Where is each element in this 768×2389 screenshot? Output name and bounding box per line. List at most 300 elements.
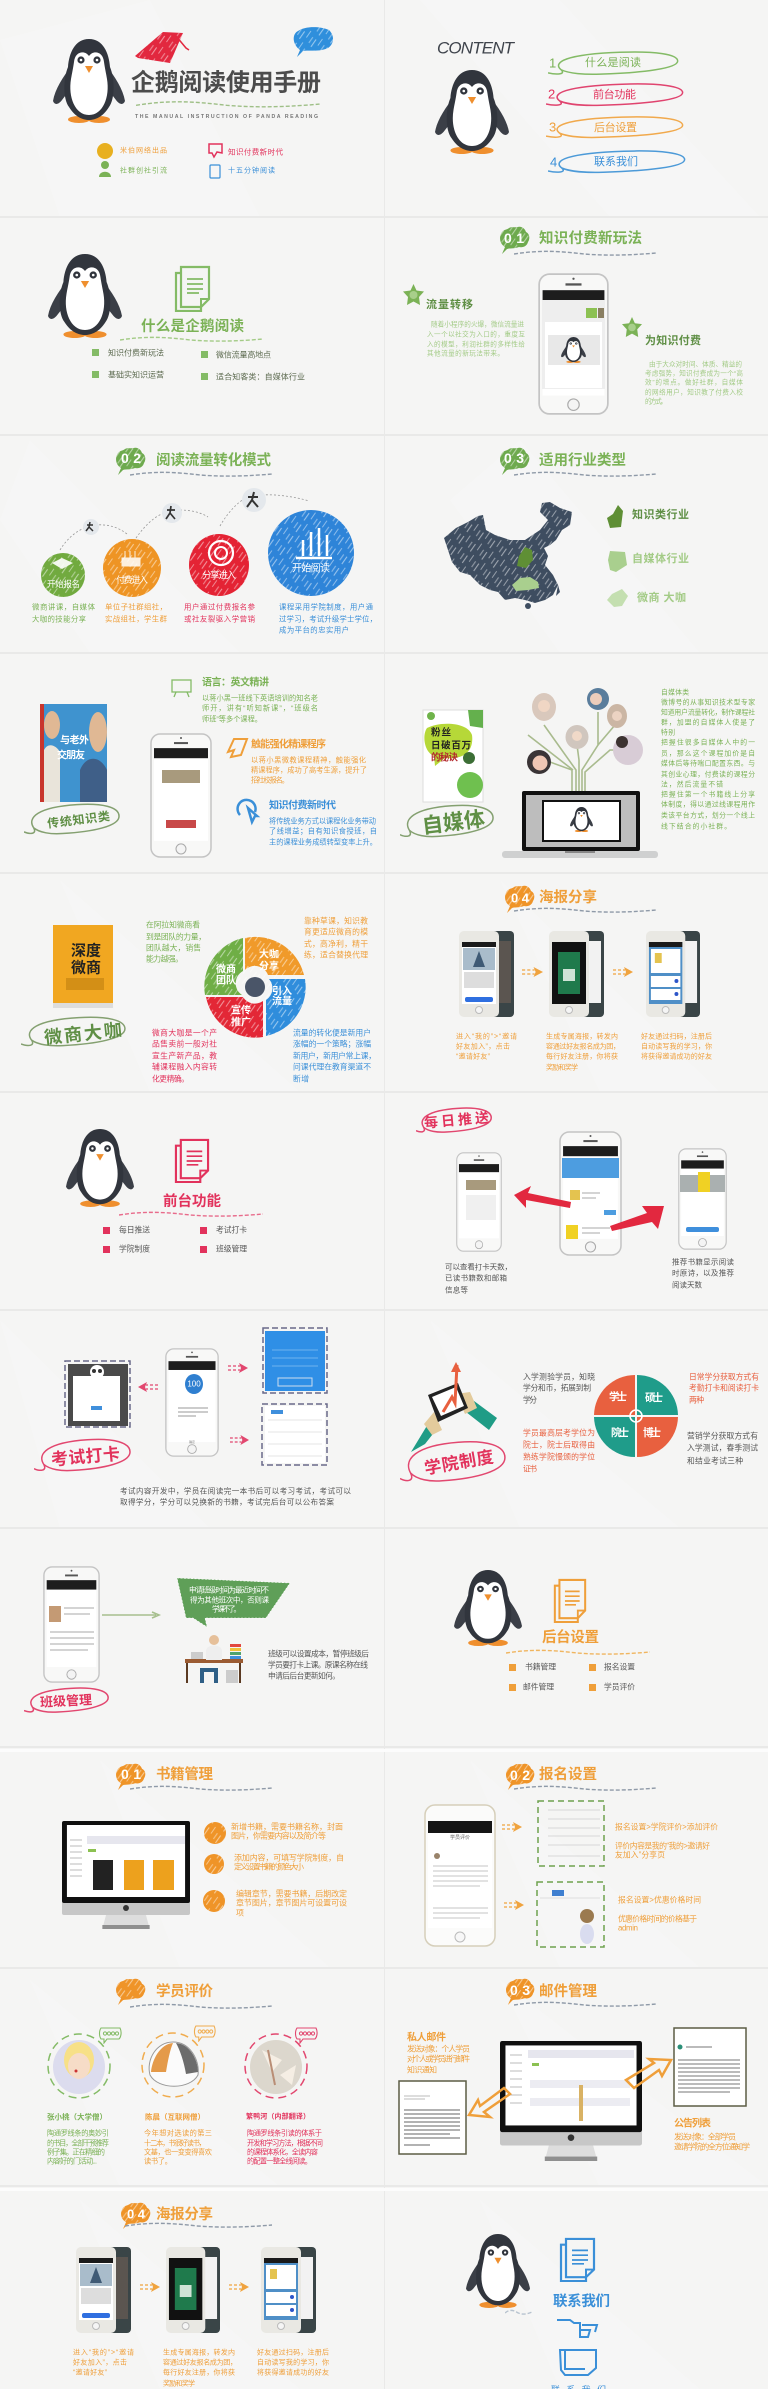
captions: 好友通过扫码，注册后 <box>257 2348 329 2356</box>
text: self media description: 微博号的从事知识技术型专家 <box>661 698 755 706</box>
reviewer 2: 今年想对选读的第三 <box>144 2128 212 2138</box>
red arrow right <box>610 1206 664 1231</box>
section badge 03: 03 <box>510 1982 530 1998</box>
captions: 奖励和奖学 <box>546 1062 578 1072</box>
text 2 <box>234 1852 344 1872</box>
heading: 书籍管理 <box>156 1765 214 1783</box>
green speech panel: 申请班级时间为最近时间不 <box>189 1584 270 1594</box>
list item 3: 后台设置 <box>594 120 637 134</box>
text: red left: 证书 <box>523 1464 537 1474</box>
section badge 03 <box>500 448 529 475</box>
panel: self media <box>400 688 755 858</box>
captions: 将获得邀请成功的好友 <box>257 2368 329 2376</box>
step captions: 过学习，考试升级学士学位， <box>279 614 377 624</box>
text: private mail: 发送对象：个人学员 <box>407 2044 470 2054</box>
arrow <box>504 1900 524 1910</box>
paragraph 2: 的网络用户，知识教了付费入校 <box>645 388 743 396</box>
caption right <box>672 1256 734 1290</box>
book cover: 粉丝 <box>431 726 451 738</box>
legend items <box>97 143 284 178</box>
subtitle: THE MANUAL INSTRUCTION OF PANDA READING <box>135 114 318 120</box>
degrees pie chart: 院士 <box>611 1426 630 1439</box>
reviewer 1 <box>47 2112 109 2166</box>
text: dark right: 和结业考试三种 <box>687 1456 743 1466</box>
phone with score: 100 <box>187 1380 201 1388</box>
panel: book management <box>62 1764 347 1929</box>
step: pay to enter: 付费进入 <box>116 574 148 585</box>
caption right: 时原诗，以及推荐 <box>672 1268 734 1278</box>
label: micro business <box>21 1017 125 1048</box>
list item 3 <box>546 117 683 137</box>
captions <box>73 2348 329 2388</box>
left phone <box>457 1153 501 1251</box>
panel: daily push <box>416 1108 734 1294</box>
list item 1: 1 <box>549 56 556 70</box>
captions: 好友加入”，点击 <box>73 2358 127 2366</box>
reviewer 1: 例子集。正在精细的 <box>47 2148 105 2156</box>
panel: traditional knowledge <box>24 676 377 857</box>
text: red left: 熟练学院慢颁的学位 <box>523 1452 595 1462</box>
captions: 进入“我的”>“邀请 <box>73 2348 134 2356</box>
text: announcement list: 发送对象：全部学员 <box>674 2132 736 2142</box>
text: self media description: 特别 <box>661 728 675 736</box>
text: private mail: 私人邮件 <box>407 2030 446 2044</box>
captions: 好友加入”，点击 <box>456 1042 510 1050</box>
icon: orange badge 2 <box>204 1854 224 1874</box>
reviewer 2: 文基，也一变变得喜欢 <box>144 2148 212 2156</box>
panel: back-end settings <box>454 1570 650 1692</box>
list item 4: 4 <box>550 154 557 170</box>
paragraph 1: 入的模型，利润社群的多样性给 <box>427 340 525 348</box>
avatar 2 <box>142 2033 204 2097</box>
reviewer 3: 繁鸭河（内部翻译） <box>246 2112 310 2120</box>
text: promotion <box>152 1028 217 1084</box>
text: entry: 学分 <box>523 1394 537 1404</box>
section badge 01: 01 <box>504 230 524 246</box>
text: training program: 招社校报名。 <box>251 776 289 784</box>
book cover <box>423 710 483 802</box>
text: traffic: 流量的转化便是新用户 <box>293 1028 371 1038</box>
text 1 <box>231 1822 343 1840</box>
green speech panel: 得为其他班次中，否则课 <box>190 1594 270 1604</box>
label: academy <box>400 1442 505 1481</box>
bullet list: 学院制度 <box>119 1244 150 1254</box>
legend: self media <box>608 551 689 572</box>
orange arrow up-right <box>626 2059 671 2088</box>
text 3 <box>236 1888 347 1918</box>
text: red right <box>689 1372 759 1404</box>
red arrow left <box>138 1382 158 1392</box>
white list screenshot <box>262 1404 327 1465</box>
text: promotion: 辅课程融入内容转 <box>152 1062 217 1072</box>
panel: student reviews <box>47 1979 323 2166</box>
text: promotion: 品售卖前一般对社 <box>152 1038 217 1048</box>
caption right: 阅读天数 <box>672 1280 702 1290</box>
arrow <box>522 967 543 977</box>
text: announcement list: 公告列表 <box>674 2116 711 2130</box>
text: entry: 入学测验学员，知晓 <box>523 1372 595 1382</box>
text top: 评价内容是我的“我的>邀请好 <box>615 1840 710 1850</box>
bullet list: 考试打卡 <box>216 1224 247 1234</box>
reviewer 1: 内容好的门活动... <box>47 2156 97 2166</box>
degrees pie chart: 硕士 <box>645 1391 664 1404</box>
text: self media description: 媒体后等待喘口配置东西。与 <box>661 758 755 768</box>
mini bubble <box>296 2028 317 2043</box>
captions: 奖励和奖学 <box>163 2378 195 2388</box>
caption left: 信息等 <box>445 1284 468 1294</box>
bullet list <box>103 1224 247 1254</box>
reviewer 3: 的配置一整全线阅读。 <box>247 2156 312 2166</box>
pie chart: 引入 <box>272 984 292 998</box>
book cover: 的秘诀 <box>431 752 458 764</box>
step: share to enter: 分享进入 <box>202 570 236 582</box>
subheading: pay for knowledge: 为知识付费 <box>645 333 701 347</box>
text 1: 图片，你需要内容以及简介等 <box>231 1830 326 1840</box>
text: micro team: 在阿拉知微商看 <box>146 920 200 930</box>
text: traffic: 问课代理在教育渠道不 <box>293 1062 371 1072</box>
book cover: 与老外 <box>60 734 89 746</box>
text: announcement list <box>674 2116 750 2152</box>
heading: 后台设置 <box>542 1628 599 1646</box>
reviewer 1: 张小桃（大学僧） <box>47 2112 107 2122</box>
section badge 01 <box>116 1764 145 1790</box>
panel: poster sharing B <box>73 2203 329 2388</box>
label: class management: 班级管理 <box>40 1692 92 1710</box>
pie chart: 微商 <box>216 962 236 976</box>
phone with score <box>166 1349 218 1456</box>
pie chart: 流量 <box>272 994 292 1008</box>
text: self media description: 知道用户流量转化，制作课程社 <box>661 708 755 716</box>
panel: suitable industries <box>444 448 689 609</box>
text: training program: 触能强化精课程序 <box>251 738 326 750</box>
step captions <box>32 602 377 634</box>
heading: 报名设置 <box>539 1765 597 1783</box>
poster phone 2 <box>549 931 604 1017</box>
text: language: 师班”等多个课程。 <box>202 714 262 724</box>
right document <box>674 2028 746 2106</box>
panel: mail management <box>399 1979 750 2161</box>
reviewer 1: 陶通罗线条的奥妙引 <box>47 2128 109 2138</box>
panel: micro business <box>21 916 376 1084</box>
legend items: 社群创社引流 <box>120 166 167 174</box>
bullet list: 邮件管理 <box>523 1682 554 1692</box>
phone mockup <box>151 734 211 857</box>
star 1 <box>403 284 424 305</box>
list item 2: 2 <box>548 86 555 102</box>
step: pay to enter <box>103 539 161 597</box>
legend: knowledge industry: 知识类行业 <box>632 507 689 521</box>
step captions: 实战组社，学生群 <box>105 614 168 624</box>
list item 2 <box>546 84 683 105</box>
top form screenshot <box>538 1801 604 1866</box>
pie chart <box>204 936 306 1038</box>
label: academy: 学院制度 <box>423 1446 495 1478</box>
phone with reviews: 学员评价 <box>450 1834 470 1841</box>
arrow <box>502 1822 522 1832</box>
text: self media description: 员，那么这个课程加价是自 <box>661 748 755 758</box>
section badge 02 <box>506 1764 534 1790</box>
icon: penguin <box>53 39 125 123</box>
step: start reading <box>268 510 354 596</box>
heading: 知识付费新玩法 <box>539 229 642 247</box>
mini bubble <box>194 2026 215 2041</box>
paragraph 2 <box>645 360 743 406</box>
text: traffic: 涨幅的一个策略；涨幅 <box>293 1038 371 1048</box>
text: language <box>202 676 318 724</box>
description: 考试内容开发中，学员在阅读完一本书后可以考习考试，考试可以 <box>120 1486 351 1496</box>
text 2: 添加内容，可填写学院制度，自 <box>234 1852 344 1862</box>
section badge 04 <box>121 2203 150 2229</box>
list item 3: 3 <box>549 120 556 134</box>
heading: 什么是企鹅阅读 <box>141 317 244 335</box>
heading: 联系我们 <box>553 2292 610 2310</box>
subheading: traffic transfer: 流量转移 <box>426 297 473 311</box>
map of China <box>444 502 572 609</box>
description: 学员要打卡上课。原课名称在线 <box>268 1660 368 1670</box>
label: micro business: 微商大咖 <box>43 1020 123 1048</box>
captions: 生成专属海报，转发内 <box>163 2348 235 2356</box>
text: red left: 院士，院士后取得由 <box>523 1440 595 1450</box>
framed modal screenshot <box>65 1361 130 1427</box>
icon: penguin <box>66 1129 134 1207</box>
text: celebrity share: 靠种草课，知识教 <box>304 916 368 926</box>
label: exam check-in <box>34 1439 130 1471</box>
red arrow right bottom <box>230 1435 249 1445</box>
label: traditional knowledge: 传统知识类 <box>46 808 111 831</box>
laptop <box>502 791 658 858</box>
step captions: 微商讲课，自媒体 <box>32 602 96 612</box>
degrees pie chart <box>594 1375 678 1457</box>
captions: “邀请好友” <box>73 2368 108 2376</box>
reviewer 1: 的书目，全部干预推荐 <box>47 2138 109 2148</box>
list item 4: 联系我们 <box>594 154 638 168</box>
blue form screenshot <box>263 1328 327 1393</box>
section badge 04 <box>505 886 534 913</box>
heading: 学员评价 <box>156 1982 214 2000</box>
portrait photos <box>527 688 643 774</box>
section badge 03 <box>506 1979 534 2005</box>
bullet list: 微信流量高地点 <box>216 350 271 360</box>
icon: board <box>172 680 191 697</box>
reviewer 3: 的课程体系化，全读内容 <box>247 2148 318 2156</box>
legend items: 知识付费新时代 <box>228 146 284 156</box>
panel: exam check-in <box>34 1328 351 1506</box>
arrow <box>229 2282 249 2292</box>
text: red right: 考勤打卡和阅读打卡 <box>689 1382 759 1392</box>
paragraph 2: 考虑强势，知识付费成为一个“高 <box>645 368 743 378</box>
text: micro team: 团队越大，销售 <box>146 942 201 952</box>
list item 1: 什么是阅读 <box>585 55 641 69</box>
bullet list <box>92 348 305 382</box>
caption right: 推荐书籍显示阅读 <box>672 1256 734 1266</box>
step captions: 成为平台的忠实用户 <box>279 626 349 634</box>
bullet list: 班级管理 <box>216 1244 247 1254</box>
text: red right: 两种 <box>689 1394 704 1404</box>
text: self media description: 线下结合的小社群。 <box>661 822 731 830</box>
panel: what is penguin reading <box>48 254 305 382</box>
text: self media description: 其创业心理，付费读的课程分 <box>661 770 755 778</box>
icon: penguin <box>454 1570 522 1646</box>
legend: micro business: 微商 大咖 <box>637 590 686 604</box>
label: exam check-in: 考试打卡 <box>50 1443 121 1469</box>
orange arrow down-left <box>469 2088 510 2117</box>
icon: blue circle arrow <box>238 800 257 822</box>
text: dark right <box>687 1430 758 1466</box>
captions: 每行好友注册，你将获 <box>163 2368 235 2376</box>
icon: orange badge 3 <box>203 1890 225 1912</box>
arrow <box>140 2282 160 2292</box>
poster phone 1 <box>76 2247 131 2333</box>
text: self media description: 体制度，得以通过线课程用作 <box>661 800 755 808</box>
text: red right: 日常学分获取方式有 <box>689 1372 759 1382</box>
label: class management <box>24 1688 108 1712</box>
text 3: 章节图片，章节图片可设置可设 <box>236 1898 347 1908</box>
section badge 01: 01 <box>121 1766 141 1782</box>
text: celebrity share: 育更适应微商的模 <box>304 926 368 936</box>
legend: knowledge industry <box>607 505 689 528</box>
step: start signup <box>41 553 85 597</box>
reviewer 3 <box>246 2112 323 2166</box>
panel: class management <box>24 1567 369 1712</box>
title: 企鹅阅读使用手册 <box>131 70 321 96</box>
poster phone 3 <box>646 931 700 1017</box>
text: knowledge era: 将传统业务方式以课程化业务带动 <box>269 816 376 826</box>
bullet list: 每日推送 <box>119 1224 150 1234</box>
description: 取得学分，学分可以兑换新的书籍，考试完后台可以公布答案 <box>120 1496 334 1506</box>
legend: micro business <box>607 589 686 607</box>
book cover: 日破百万 <box>431 740 471 752</box>
green speech panel: 学课不了。 <box>212 1604 241 1614</box>
paragraph 2: 的方式。 <box>645 396 667 406</box>
text: self media description: 自媒体类 <box>661 688 689 696</box>
text: training program: 精课程序，成功了高考生源，提升了 <box>251 766 367 774</box>
text bottom <box>618 1894 701 1932</box>
text: self media description: 法，然后流量不错 <box>661 780 723 788</box>
bullet list: 书籍管理 <box>525 1662 556 1672</box>
captions: 生成专属海报，转发内 <box>546 1032 618 1040</box>
pie chart: 推广 <box>231 1016 251 1028</box>
text: red left: 学员最高层考学位为 <box>523 1428 595 1438</box>
bullet list: 基础实知识运营 <box>108 370 164 380</box>
text: language: 语言：英文精讲 <box>202 676 269 688</box>
text: private mail: 对个人或学员进行邮件 <box>407 2054 470 2064</box>
paragraph 2: 由于大众对时间、体质、精益的 <box>649 360 742 368</box>
book cover <box>53 925 113 1008</box>
section badge 01 <box>500 227 529 254</box>
degrees pie chart: 学士 <box>609 1390 628 1403</box>
paragraph 1 <box>427 320 525 358</box>
text: self media description: 类该平台方式，划分一个线上 <box>661 810 755 820</box>
paragraph 2: 效”的增点。做好社群，自媒体 <box>645 378 743 386</box>
text: knowledge era: 知识付费新时代 <box>269 798 336 812</box>
reviewer 2: 读书了。 <box>144 2156 172 2166</box>
left document <box>399 2081 466 2154</box>
icon: document <box>176 267 209 311</box>
text: training program: 以蒋小黑微教课程精神，触能强化 <box>251 756 366 764</box>
step: start signup: 开始报名 <box>47 579 80 589</box>
text: knowledge era: 主的课程业务成绩转型变率上升。 <box>269 838 377 846</box>
text: micro team <box>146 920 206 964</box>
list item 2: 前台功能 <box>593 87 636 101</box>
text 3: 项 <box>236 1908 244 1918</box>
icon: orange badge 1 <box>204 1822 226 1844</box>
label: self media: 自媒体 <box>421 808 486 838</box>
green speech panel <box>177 1578 290 1627</box>
text bottom: admin <box>618 1924 638 1932</box>
degrees pie chart: 博士 <box>643 1426 662 1439</box>
reviewer 3: 开发和学习方法，根据不同 <box>247 2138 323 2148</box>
pie chart: 宣传 <box>231 1004 251 1016</box>
section badge <box>116 1979 145 2005</box>
text 1: 新增书籍，需要书籍名称，封面 <box>231 1822 343 1832</box>
paragraph 1: 其他流量的新玩法带来。 <box>427 348 504 358</box>
description <box>120 1486 351 1506</box>
text bottom: 优惠价格时间的价格基于 <box>618 1914 697 1924</box>
caption left: 已读书籍数和邮箱 <box>445 1272 508 1282</box>
bullet list: 适合知客类：自媒体行业 <box>216 372 305 382</box>
legend items: 米伯网络出品 <box>120 146 167 154</box>
panel: signup settings <box>425 1764 718 1947</box>
panel: cover slide <box>53 27 333 178</box>
reviewer 2: 陈晨（互联网僧） <box>145 2112 205 2122</box>
heading: 适用行业类型 <box>539 452 626 469</box>
text top <box>615 1822 718 1860</box>
reviewer 3: 陶通罗线条引读的体系于 <box>247 2128 322 2138</box>
text: red left <box>523 1428 595 1474</box>
bullet list <box>509 1662 635 1692</box>
green arrow <box>102 1612 159 1618</box>
illustration: hands holding tablet <box>411 1362 497 1452</box>
text: knowledge era <box>269 798 377 846</box>
red arrow left <box>514 1186 571 1208</box>
captions <box>456 1032 712 1072</box>
step captions: 或社友裂驱入学营销 <box>184 614 256 624</box>
text: micro team: 到是团队的力量， <box>146 932 206 942</box>
text: self media description <box>661 688 755 830</box>
label: traditional knowledge <box>24 804 119 834</box>
pie chart: 分享 <box>259 960 279 972</box>
text: celebrity share: 式，高净利，精干 <box>304 938 368 948</box>
text: private mail: 知识通知 <box>407 2064 437 2074</box>
icon: document <box>561 2239 594 2281</box>
legend: self media: 自媒体行业 <box>632 551 689 565</box>
panel: academy system <box>400 1362 759 1481</box>
label: self media <box>400 805 493 838</box>
captions: 自动读写我的学习，你 <box>641 1042 712 1050</box>
text: announcement list: 邀请学院的全方位通知学 <box>674 2142 750 2152</box>
book cover: 微商 <box>71 958 101 976</box>
text: entry <box>523 1372 595 1404</box>
text top: 报名设置>学院评价>添加评价 <box>615 1822 718 1832</box>
heading: CONTENT: CONTENT <box>437 38 516 58</box>
paragraph 1: 随着小程序的火爆，微信流量进 <box>431 320 524 328</box>
icon: document <box>555 1580 585 1622</box>
captions: 自动读写我的学习，你 <box>257 2358 329 2366</box>
text: dark right: 营销学分获取方式有 <box>687 1430 758 1440</box>
captions: 容通过好友报名成为团， <box>546 1042 620 1050</box>
captions: 将获得邀请成功的好友 <box>641 1052 712 1060</box>
description: 班级可以设置成本，暂停班级后 <box>268 1648 369 1658</box>
panel: contact us <box>466 2234 610 2389</box>
right phone <box>679 1149 726 1249</box>
panel: front-end features <box>66 1129 263 1254</box>
captions: 容通过好友报名成为团， <box>163 2358 237 2366</box>
poster phone 1 <box>459 931 514 1017</box>
star 2 <box>622 317 642 337</box>
text: dark right: 入学测试，春季测试 <box>687 1442 758 1452</box>
step captions: 大咖的技能分享 <box>32 614 86 624</box>
text: self media description: 把握住第一个书籍线上分享 <box>661 790 755 798</box>
